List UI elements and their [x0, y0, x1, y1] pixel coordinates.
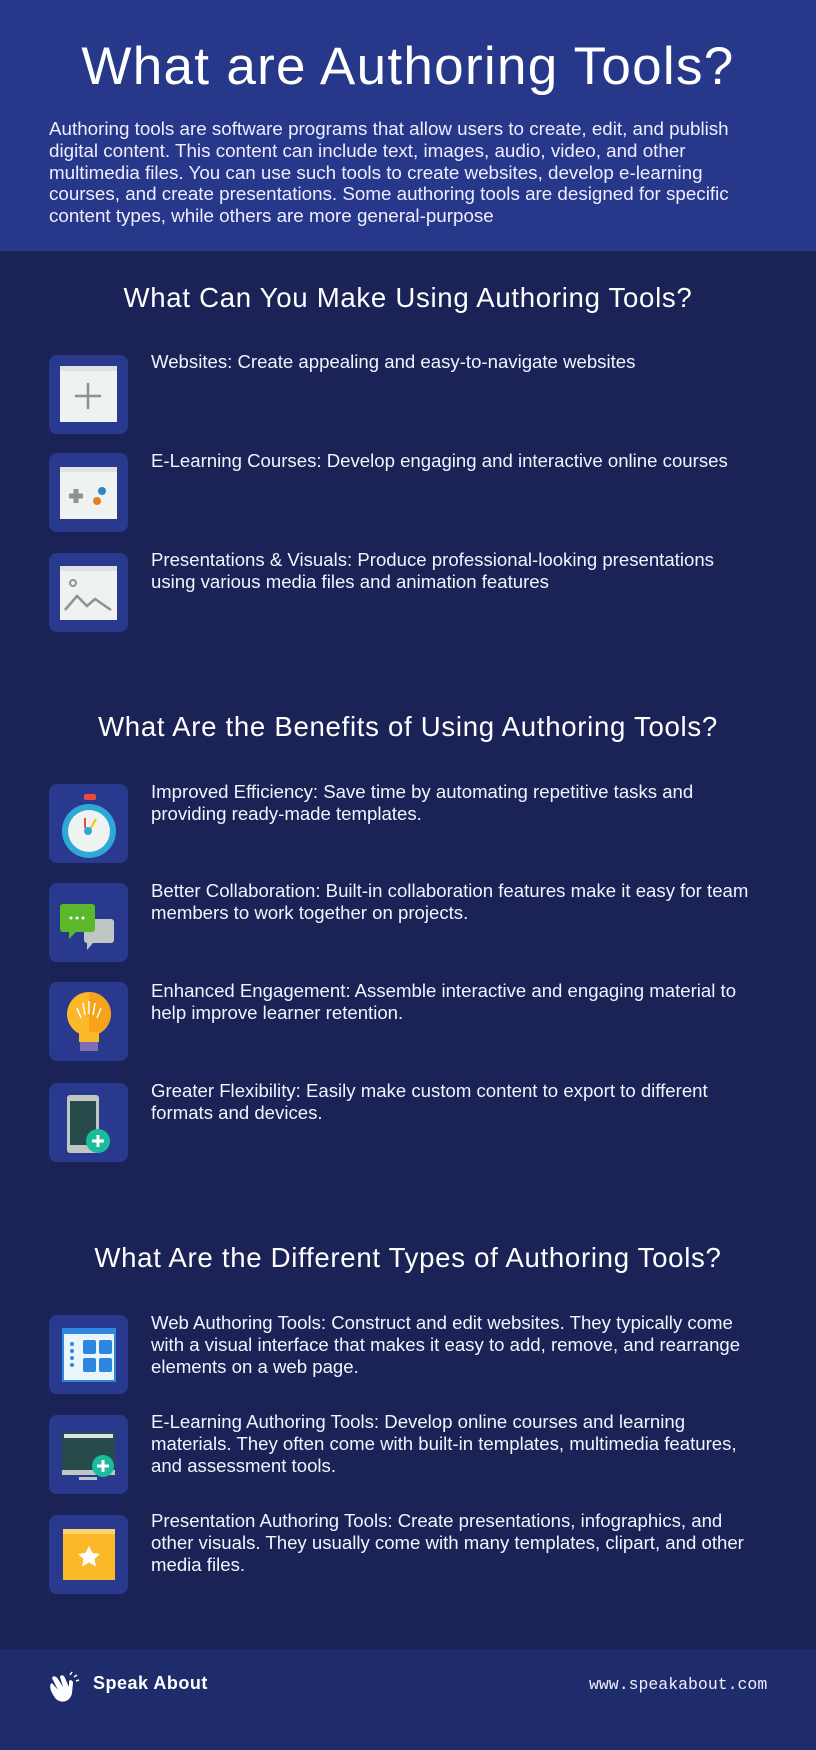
icon: website: [49, 355, 128, 434]
text: flexibility: formats and devices.: [151, 1102, 323, 1123]
text: efficiency: [151, 781, 693, 824]
footer: [0, 1649, 816, 1750]
text: flexibility: [151, 1080, 708, 1123]
text: efficiency: Improved Efficiency: Save time by automating repetitive tasks and: [151, 781, 693, 802]
text: presentations: Presentations & Visuals: Produce professional-looking presentations: [151, 549, 714, 570]
website url: www.speakabout.com: [589, 1675, 767, 1694]
icon: star document: [49, 1515, 128, 1594]
text: e-learning authoring: E-Learning Authoring Tools: Develop online courses and learning: [151, 1411, 685, 1432]
text: e-learning: E-Learning Courses: Develop engaging and interactive online courses: [151, 450, 728, 471]
text: e-learning authoring: and assessment tools.: [151, 1455, 336, 1476]
text: web authoring: elements on a web page.: [151, 1356, 359, 1377]
intro paragraph: digital content. This content can include text, images, audio, video, and other: [49, 140, 686, 161]
text: efficiency: providing ready-made templates.: [151, 803, 422, 824]
icon: chat bubbles: [49, 883, 128, 962]
text: presentation authoring: Presentation Authoring Tools: Create presentations, infographics, and: [151, 1510, 722, 1531]
text: flexibility: Greater Flexibility: Easily make custom content to export to different: [151, 1080, 708, 1101]
text: collaboration: members to work together on projects.: [151, 902, 468, 923]
text: engagement: help improve learner retention.: [151, 1002, 403, 1023]
header panel: [0, 0, 816, 251]
icon: web layout: [49, 1315, 128, 1394]
intro paragraph: Authoring tools are software programs that allow users to create, edit, and publish: [49, 118, 729, 139]
icon: monitor plus: [49, 1415, 128, 1494]
icon: light bulb: [49, 982, 128, 1061]
text: presentations: using various media files and animation features: [151, 571, 549, 592]
text: e-learning authoring: [151, 1411, 737, 1476]
icon: phone plus: [49, 1083, 128, 1162]
intro paragraph: [49, 118, 729, 226]
brand name: Speak About: [93, 1673, 208, 1693]
text: presentations: [151, 549, 714, 592]
text: engagement: [151, 980, 736, 1023]
text: web authoring: Web Authoring Tools: Construct and edit websites. They typically come: [151, 1312, 733, 1333]
text: presentation authoring: media files.: [151, 1554, 245, 1575]
heading: types: What Are the Different Types of Authoring Tools?: [94, 1242, 722, 1273]
text: collaboration: [151, 880, 748, 923]
intro paragraph: content types, while others are more general-purpose: [49, 205, 494, 226]
text: collaboration: Better Collaboration: Built-in collaboration features make it easy for team: [151, 880, 748, 901]
text: presentation authoring: [151, 1510, 744, 1575]
intro paragraph: multimedia files. You can use such tools to create websites, develop e-learning: [49, 162, 703, 183]
icon: presentations: [49, 553, 128, 632]
text: web authoring: with a visual interface that makes it easy to add, remove, and rearrange: [151, 1334, 740, 1355]
text: e-learning authoring: materials. They often come with built-in templates, multimedia features,: [151, 1433, 737, 1454]
text: engagement: Enhanced Engagement: Assemble interactive and engaging material to: [151, 980, 736, 1001]
text: presentation authoring: other visuals. They usually come with many templates, clipart, and other: [151, 1532, 744, 1553]
title: What are Authoring Tools?: [81, 37, 735, 96]
text: web authoring: [151, 1312, 740, 1377]
heading: what can you make: What Can You Make Using Authoring Tools?: [124, 282, 692, 313]
icon: waving hand logo: [50, 1672, 80, 1702]
icon: stopwatch: [49, 784, 128, 863]
icon: e-learning: [49, 453, 128, 532]
intro paragraph: courses, and create presentations. Some authoring tools are designed for specific: [49, 183, 729, 204]
heading: benefits: What Are the Benefits of Using Authoring Tools?: [98, 711, 718, 742]
text: websites: Websites: Create appealing and easy-to-navigate websites: [151, 351, 635, 372]
